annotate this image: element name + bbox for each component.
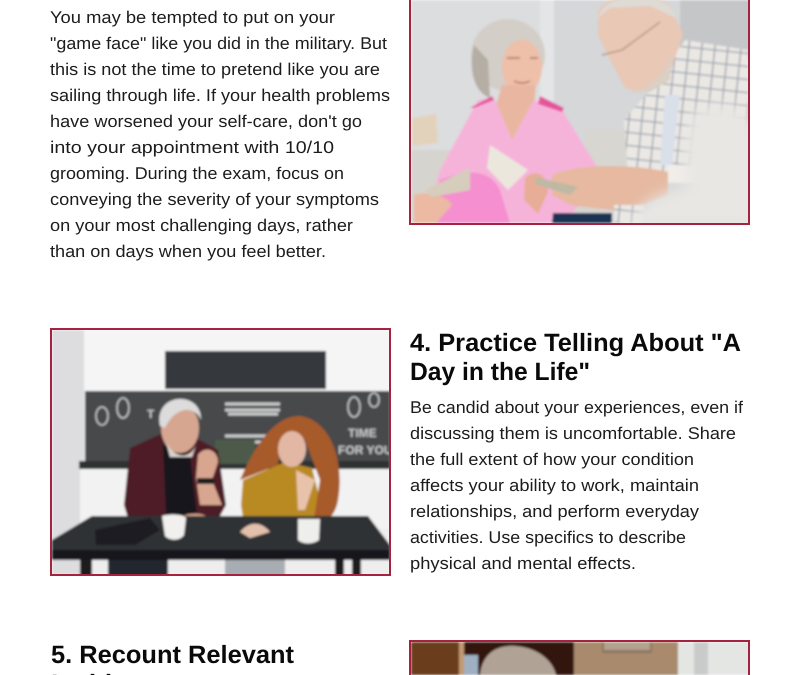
binder, mugs, hand xyxy=(95,518,160,545)
text block: keep exam honest paragraph: this is not the time to pretend like you are xyxy=(50,60,380,79)
text block: practice telling paragraph: relationships, and perform everyday xyxy=(410,502,700,521)
photo: older man and young woman at kitchen table: T xyxy=(147,407,155,421)
man head xyxy=(598,0,683,92)
text block: practice telling paragraph: discussing them is uncomfortable. Share xyxy=(410,424,736,443)
text block: keep exam honest paragraph: conveying the severity of your symptoms xyxy=(50,190,379,209)
photo: older couple counting money xyxy=(410,0,760,228)
text block: keep exam honest paragraph xyxy=(50,8,390,261)
text block: keep exam honest paragraph: on your most challenging days, rather xyxy=(50,216,353,235)
text block: practice telling paragraph: the full extent of how your condition xyxy=(410,450,694,469)
chalk drawings xyxy=(96,393,379,442)
text block: keep exam honest paragraph: You may be tempted to put on your xyxy=(50,8,335,27)
text block: keep exam honest paragraph: into your appointment with 10/10 xyxy=(50,138,334,157)
text block: practice telling paragraph: affects your ability to work, maintain xyxy=(410,476,699,495)
pink shirt xyxy=(424,98,596,223)
text block: keep exam honest paragraph: "game face" like you did in the military. But xyxy=(50,34,387,53)
woman hair xyxy=(471,19,545,91)
text block: keep exam honest paragraph: than on days when you feel better. xyxy=(50,242,326,261)
photo: older man and young woman at kitchen table: TIME xyxy=(348,426,377,440)
photo: man in office, cropped xyxy=(410,641,750,675)
text block: keep exam honest paragraph: have worsened your self-care, don't go xyxy=(50,112,362,131)
woman face and neck xyxy=(502,40,542,86)
hands and money xyxy=(552,166,668,212)
table xyxy=(52,514,389,552)
woman xyxy=(240,462,320,518)
text block: keep exam honest paragraph: sailing through life. If your health problems xyxy=(50,86,390,105)
heading: 4. Practice Telling About "A Day in the Life" xyxy=(410,329,741,386)
heading: 5. Recount Relevant Incidents: 5. Recount Relevant xyxy=(51,641,295,669)
text block: practice telling paragraph: Be candid about your experiences, even if xyxy=(410,398,743,417)
text block: practice telling paragraph: activities. Use specifics to describe xyxy=(410,528,686,547)
text block: keep exam honest paragraph: grooming. During the exam, focus on xyxy=(50,164,344,183)
text block: practice telling paragraph xyxy=(410,398,743,573)
heading: 4. Practice Telling About "A Day in the Life": 4. Practice Telling About "A xyxy=(410,329,741,357)
photo: older man and young woman at kitchen table: FOR YOU xyxy=(338,443,392,457)
text block: practice telling paragraph: physical and mental effects. xyxy=(410,554,636,573)
man xyxy=(124,432,226,525)
blurred foreground shape xyxy=(631,100,748,222)
heading: 4. Practice Telling About "A Day in the Life": Day in the Life" xyxy=(410,358,590,386)
man shirt xyxy=(624,40,748,175)
photo: older man and young woman at kitchen table xyxy=(51,329,392,578)
